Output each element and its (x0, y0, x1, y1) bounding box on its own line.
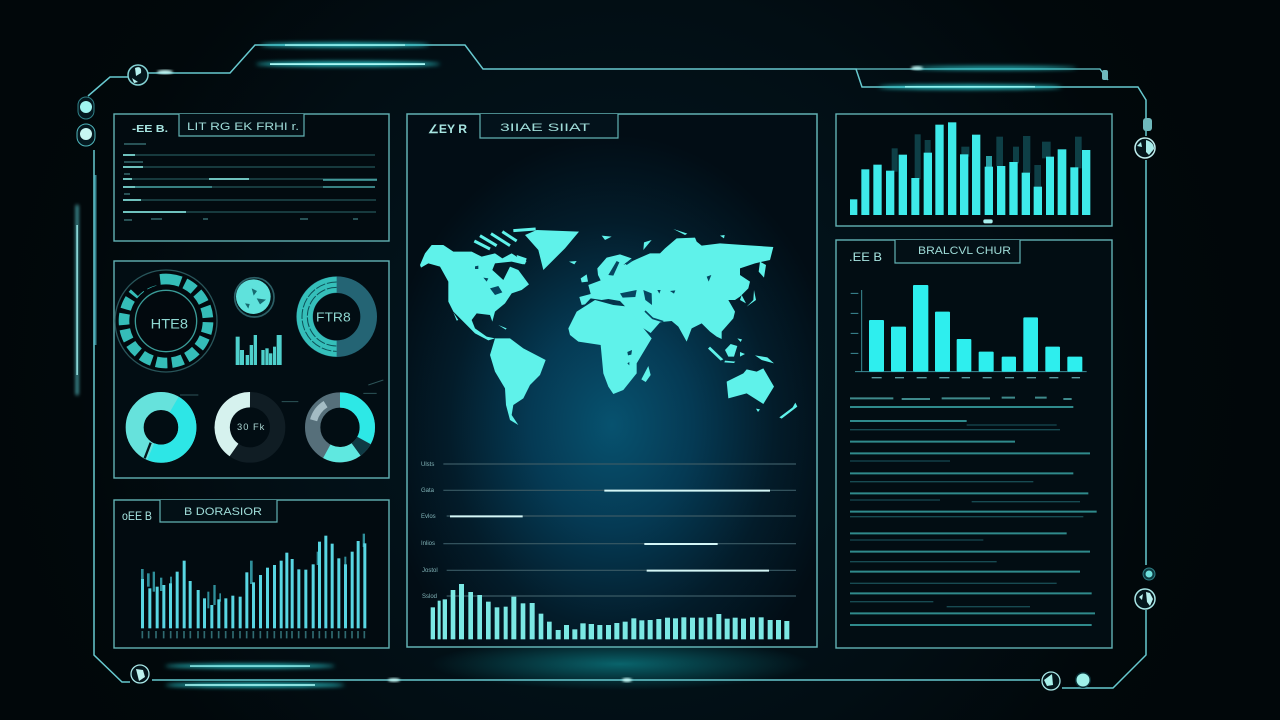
panel label: oEE B (122, 509, 152, 523)
panel label: ∠EY R (428, 124, 468, 136)
panel: right bar chart and text (836, 240, 1112, 648)
range lines (443, 464, 796, 596)
donut: teal (125, 391, 197, 463)
node: upper right (1102, 70, 1155, 158)
donut: white and dark (222, 400, 278, 455)
panel tab (895, 240, 1020, 263)
panel: gauges and donuts (114, 261, 389, 478)
range labels: Evlos (421, 514, 436, 520)
bar chart (141, 534, 366, 638)
panel: top right bar chart (836, 114, 1112, 226)
donut: white and dark: 30 Fk (237, 422, 265, 432)
line rows (123, 144, 377, 220)
mini bar chart (236, 335, 282, 365)
node: upper left capsules (77, 97, 95, 146)
bars (850, 122, 1090, 215)
node: bottom left (131, 665, 149, 683)
panel tab (160, 500, 277, 522)
range labels: Inlios (421, 541, 435, 547)
panel tab (480, 114, 618, 138)
frame light streaks (76, 43, 1147, 687)
panel tab: 3IIAE SIIAT (500, 122, 590, 134)
panel tab: B DORASIOR (184, 506, 262, 518)
gauge: half ring: FTR8 (316, 311, 351, 325)
ghost bars (892, 134, 1082, 188)
frame nodes (77, 65, 1155, 690)
bottom bar chart (431, 584, 789, 639)
gauge: small disc (235, 278, 274, 317)
gauge: half ring (297, 277, 369, 357)
node: lower right (1135, 568, 1155, 609)
panel: top left line chart (114, 114, 389, 241)
bar chart (851, 285, 1087, 378)
panel tab: LIT RG EK FRHI r. (187, 121, 299, 133)
gauge: segmented ring (115, 270, 217, 372)
range labels: Gata (421, 488, 435, 494)
North America, Arctic islands and Greenland (420, 229, 579, 340)
gauge: segmented ring: HTE8 (151, 315, 188, 331)
range labels: Ulsts (421, 462, 434, 468)
Africa, South America, Oceania (490, 300, 797, 425)
range labels (421, 462, 438, 600)
outer HUD frame (88, 45, 1146, 688)
range labels: Jostol (422, 568, 438, 574)
panel tab: BRALCVL CHUR (918, 245, 1011, 257)
donut: multi segment (302, 389, 378, 466)
text lines (850, 398, 1097, 625)
node: top left globe (128, 65, 148, 85)
small callout ticks (180, 380, 383, 402)
world map (420, 229, 797, 425)
node: bottom right (1042, 672, 1091, 690)
bottom glow (430, 638, 810, 690)
range labels: Sslod (422, 594, 437, 600)
panel label: -EE B. (132, 123, 168, 135)
panel: bottom left bars (114, 500, 389, 648)
panel: center world map (407, 114, 817, 647)
panel tab (179, 114, 304, 136)
scroll marker (983, 219, 993, 223)
Eurasia (579, 229, 773, 342)
panel label: .EE B (849, 252, 882, 264)
Persian Gulf (645, 311, 663, 322)
